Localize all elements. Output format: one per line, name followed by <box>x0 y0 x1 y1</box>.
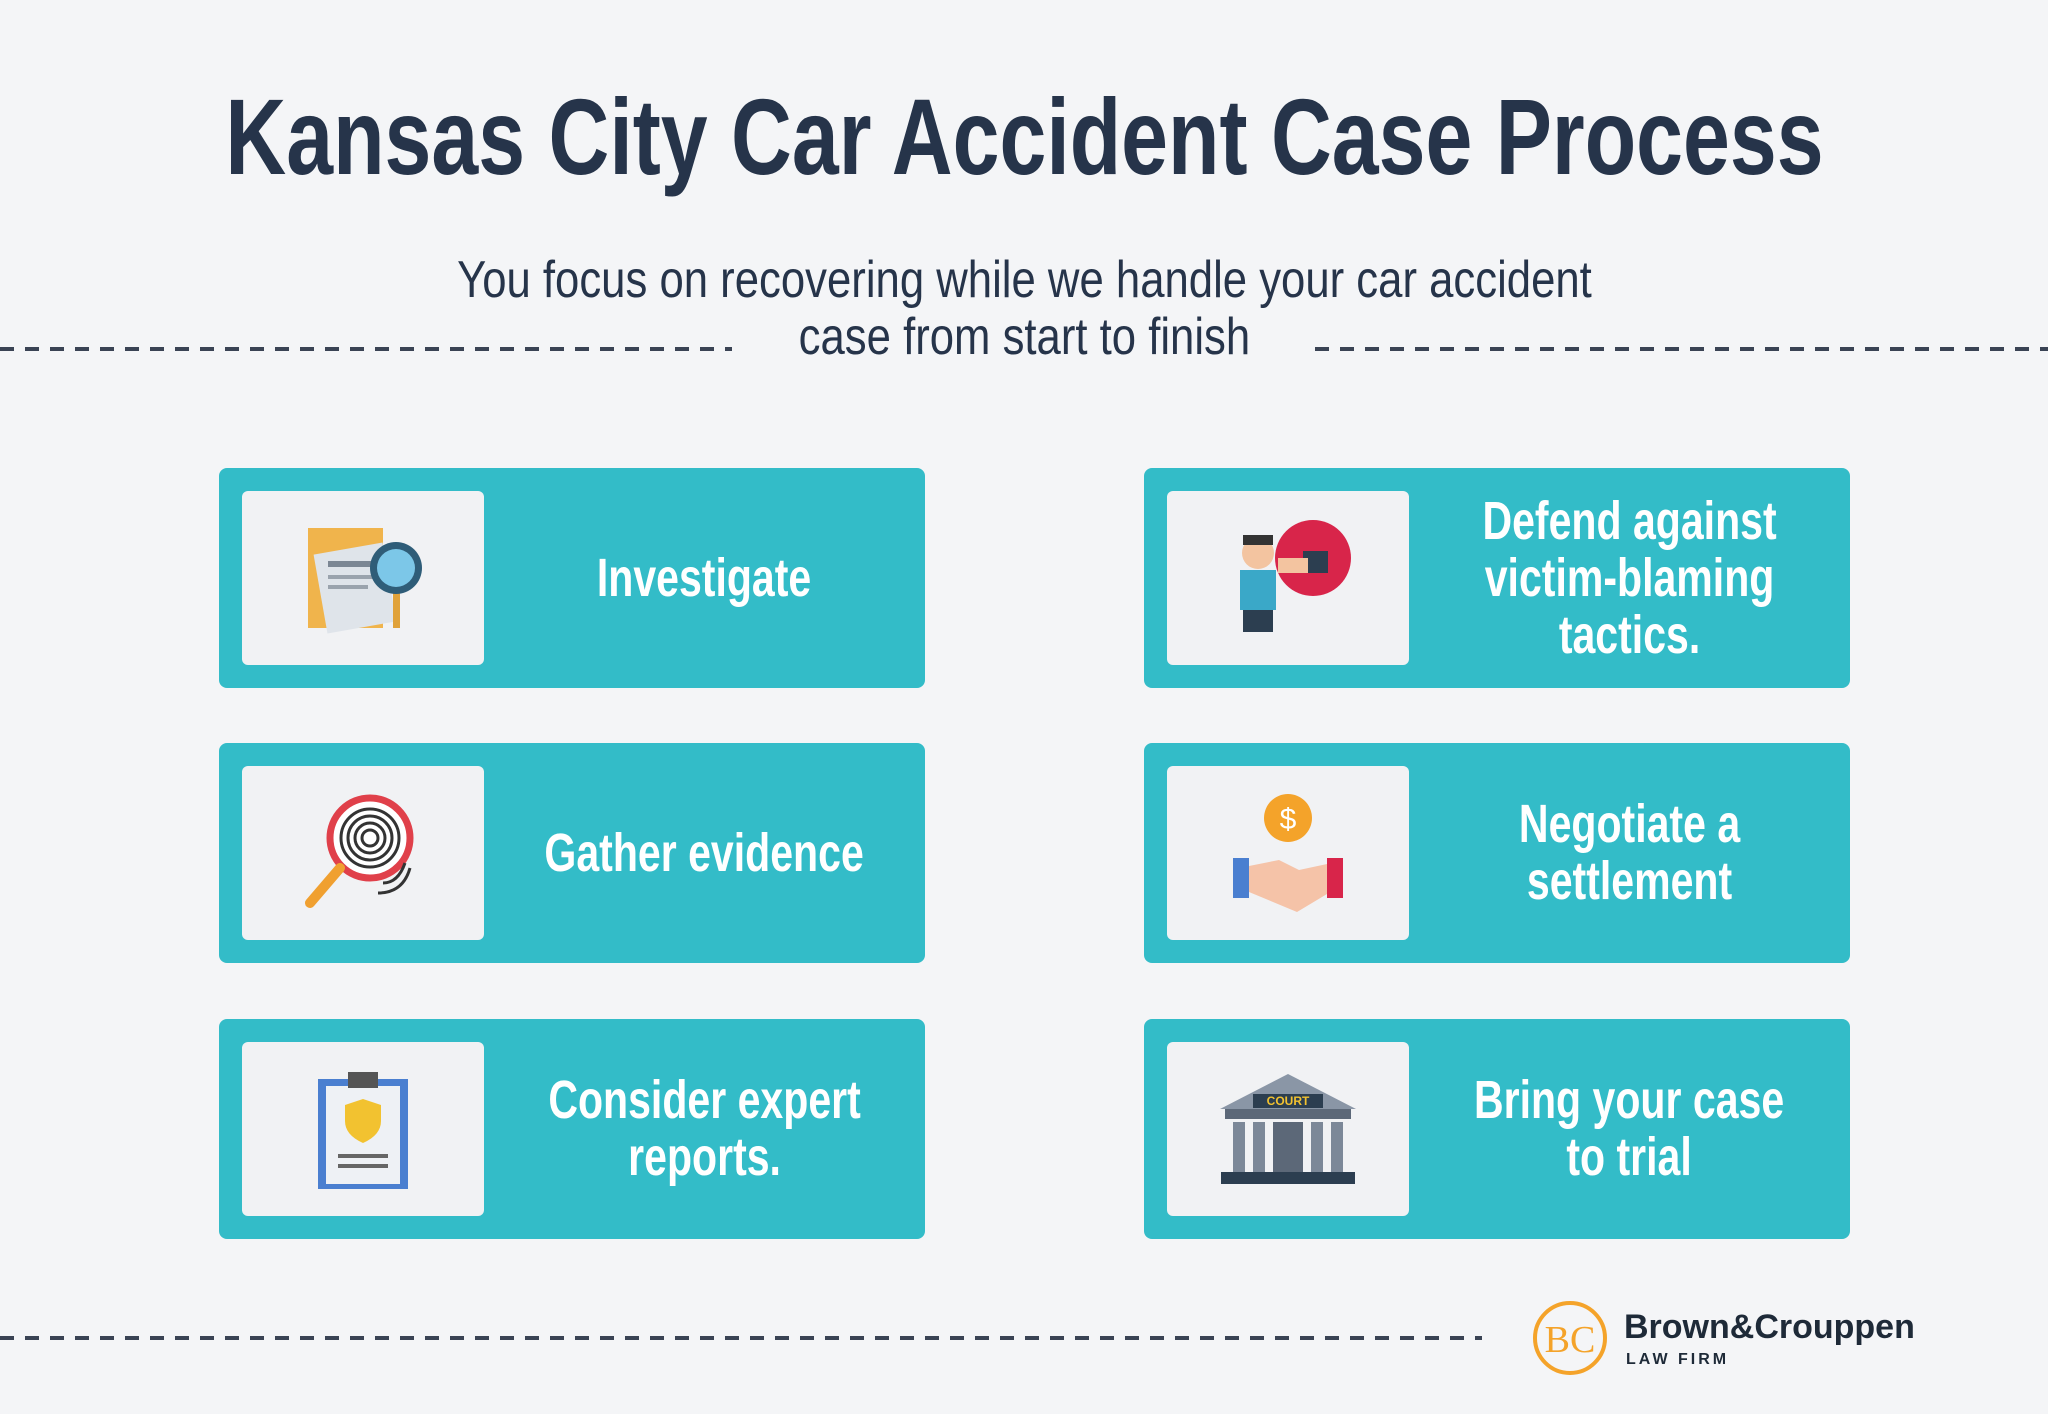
icon: courthouse: COURT <box>1267 1094 1310 1108</box>
label <box>548 1070 861 1187</box>
card: gather evidence <box>219 743 925 963</box>
label: reports. <box>628 1127 781 1187</box>
label: Gather evidence <box>545 822 864 882</box>
label: victim-blaming <box>1485 548 1774 608</box>
icon: courthouse <box>1167 1042 1409 1216</box>
icon: handshake coin: $ <box>1280 803 1297 836</box>
card: negotiate <box>1144 743 1850 963</box>
card: trial <box>1144 1019 1850 1239</box>
label: Defend against <box>1482 490 1777 550</box>
subtitle <box>457 251 1592 366</box>
label: settlement <box>1527 851 1732 911</box>
label <box>1519 794 1740 911</box>
icon: fingerprint magnifier <box>242 766 484 940</box>
label: Consider expert <box>548 1070 861 1130</box>
label: Bring your case <box>1474 1070 1785 1130</box>
logo: BC <box>1545 1319 1595 1361</box>
label: Investigate <box>597 548 812 608</box>
label: Negotiate a <box>1519 794 1740 854</box>
card: defend <box>1144 468 1850 688</box>
subtitle: You focus on recovering while we handle your car accident <box>457 251 1591 309</box>
icon: folder with magnifier <box>242 491 484 665</box>
title: Kansas City Car Accident Case Process <box>225 76 1824 197</box>
logo: Brown&Crouppen <box>1624 1308 1915 1346</box>
label: to trial <box>1567 1127 1692 1187</box>
logo <box>1533 1301 1915 1375</box>
card: investigate <box>219 468 925 688</box>
icon: blamed man <box>1167 491 1409 665</box>
subtitle: case from start to finish <box>798 308 1250 366</box>
icon: handshake coin <box>1167 766 1409 940</box>
label: tactics. <box>1559 604 1700 664</box>
card: expert reports <box>219 1019 925 1239</box>
logo: LAW FIRM <box>1626 1351 1729 1368</box>
label <box>1482 490 1777 664</box>
icon: clipboard badge <box>242 1042 484 1216</box>
label <box>1474 1070 1785 1187</box>
